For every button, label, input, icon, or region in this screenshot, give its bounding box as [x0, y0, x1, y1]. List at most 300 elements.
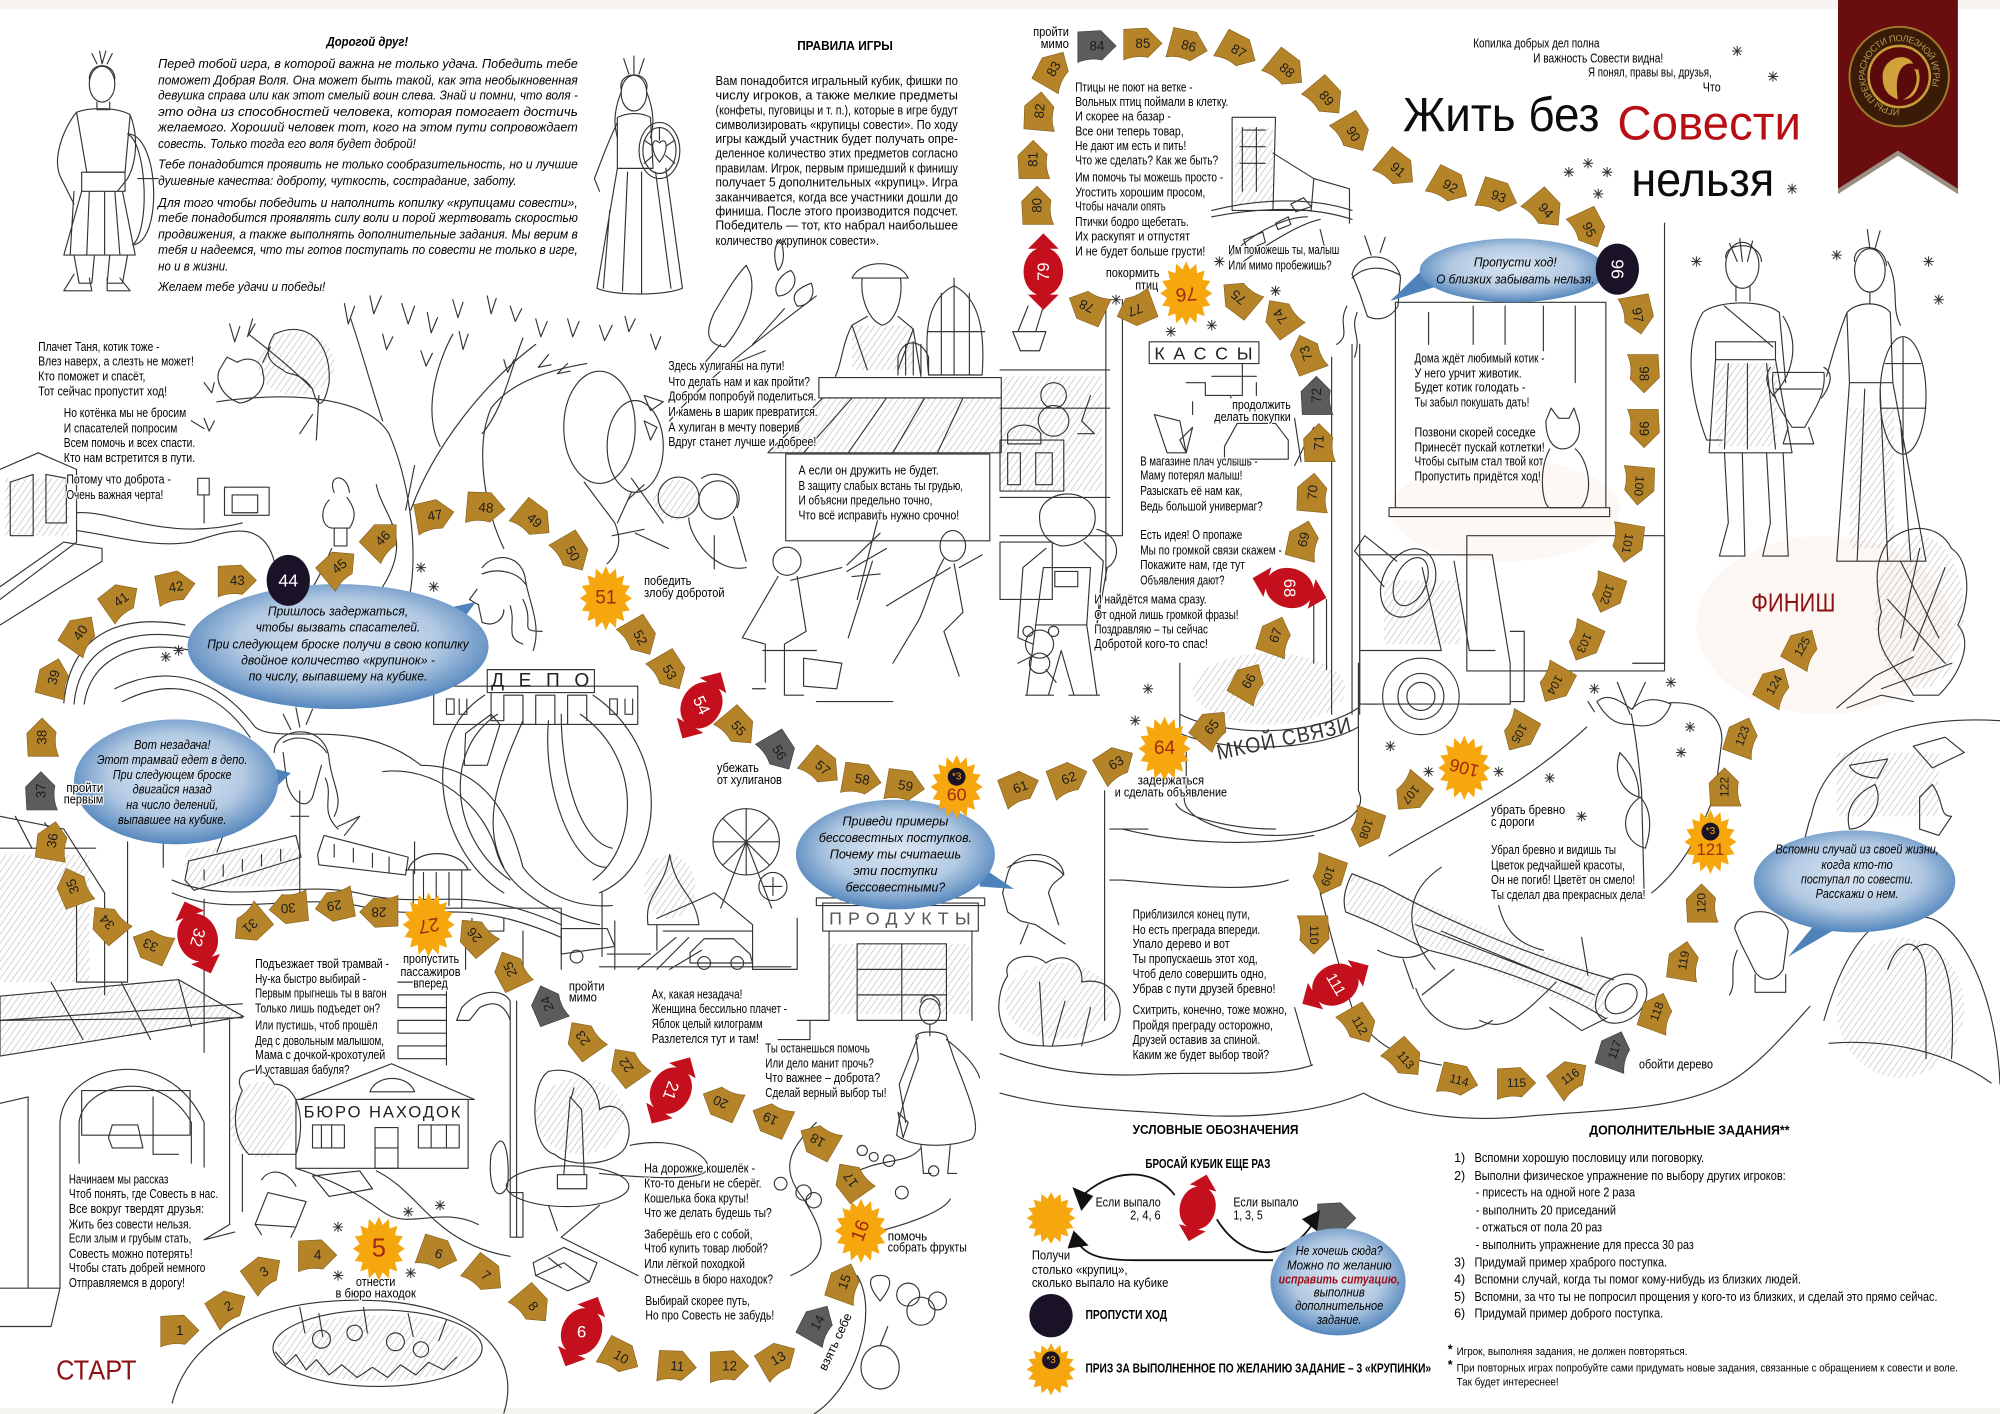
- callout: tram to depot: Вот незадача!: [134, 738, 211, 752]
- tile 49: [509, 496, 559, 545]
- poem: hooligans: Что всё исправить нужно срочно!: [798, 508, 959, 522]
- tile 81: 81: [1026, 152, 1041, 167]
- tile 55: [714, 704, 763, 754]
- illustration: speaking heads: [274, 236, 1788, 995]
- poem: hooligans: Здесь хулиганы на пути!: [668, 359, 784, 373]
- tile 72: [1301, 376, 1333, 415]
- legend panel: 1, 3, 5: [1233, 1209, 1263, 1223]
- tile 45: 45: [329, 556, 350, 577]
- tile 125: [1779, 622, 1826, 672]
- intro letter: Для того чтобы победить и наполнить копилку «крупицами совести»,: [156, 196, 578, 210]
- tile 86: 86: [1180, 37, 1198, 55]
- tile 94: 94: [1535, 200, 1557, 221]
- intro letter: желаемого. Хороший человек тот, кого на этом пути сопровождает: [157, 121, 578, 135]
- star 60: [931, 755, 983, 819]
- small action labels: вперед: [413, 976, 448, 990]
- tile 115: [1497, 1068, 1536, 1099]
- tile 7: 7: [478, 1267, 494, 1284]
- callout: examples: эти поступки: [853, 864, 938, 878]
- candy 68: 68: [1280, 579, 1299, 597]
- star 5: 5: [372, 1235, 386, 1263]
- callout: tram to depot: на число делений,: [126, 798, 218, 812]
- tile 22: [603, 1040, 651, 1089]
- poem: apples: Яблок целый килограмм: [652, 1017, 763, 1031]
- footnotes: Так будет интереснее!: [1457, 1377, 1559, 1389]
- poem: hooligans: А хулиган в мечту поверив: [668, 420, 800, 434]
- tile 70: 70: [1304, 484, 1321, 500]
- tile 86: [1166, 26, 1211, 67]
- tile 82: [1023, 91, 1058, 131]
- poem: tram: Подъезжает твой трамвай -: [255, 957, 389, 971]
- intro letter: Перед тобой игра, в которой важна не только удача. Победить тебе: [158, 57, 578, 71]
- tile 2: 2: [221, 1298, 235, 1314]
- tile 73: [1285, 330, 1328, 377]
- tile 87: [1214, 28, 1263, 75]
- poem: kitten: Очень важная черта!: [66, 488, 163, 502]
- poem: piggy bank: Что: [1703, 80, 1721, 94]
- tile 42: [155, 568, 198, 606]
- tile 66: 66: [1239, 671, 1259, 691]
- tile 98: [1628, 355, 1659, 393]
- extra tasks list: Придумай пример доброго поступка.: [1474, 1307, 1663, 1321]
- star 16: 16: [847, 1217, 874, 1244]
- tile 48: [465, 491, 506, 526]
- tile 45: [315, 542, 365, 591]
- poem: kitten: [38, 340, 195, 502]
- rules of the game: количество «крупинок совести».: [716, 234, 879, 248]
- illustration: hero couple with vase: [1691, 230, 1926, 561]
- small action labels: от хулиганов: [717, 773, 782, 787]
- intro letter: поможет Добрая Воля. Она может быть такой, как эта необыкновенная: [158, 73, 578, 87]
- tile 104: 104: [1544, 673, 1566, 697]
- tile 122: 122: [1717, 777, 1731, 797]
- legend: skip turn: [1029, 1294, 1167, 1337]
- tile 47: 47: [426, 507, 444, 524]
- legend: optional task bubble: исправить ситуацию,: [1279, 1272, 1400, 1286]
- star 64: [1139, 717, 1191, 781]
- intro letter: Желаем тебе удачи и победы!: [157, 280, 326, 294]
- extra tasks list: Вспомни случай, когда ты помог кому-нибудь из близких людей.: [1474, 1272, 1801, 1286]
- tile 13: [754, 1336, 803, 1382]
- tile 37: [26, 772, 57, 810]
- tile 41: 41: [111, 589, 132, 610]
- legend panel: сколько выпало на кубике: [1032, 1276, 1168, 1290]
- intro letter: душевные качества: доброту, чуткость, сострадание, заботу.: [158, 174, 517, 188]
- poem: birds: И скорее на базар -: [1075, 110, 1171, 124]
- poem: end of the road: Друзей оставив за спиной.: [1133, 1033, 1260, 1047]
- tile 87: 87: [1228, 41, 1249, 61]
- tile 14: 14: [807, 1312, 828, 1333]
- poem: hooligans: Вдруг станет лучше и добрее!: [668, 435, 816, 449]
- intro letter: Дорогой друг!: [326, 35, 408, 49]
- intro letter: тебя и надеемся, что ты готов поступать по совести не только в игре,: [158, 243, 578, 257]
- poem: tram: Дед с довольным малышом,: [255, 1034, 384, 1048]
- candy 79: 79: [1034, 262, 1053, 281]
- poem: start: Жить без совести нельзя.: [69, 1217, 191, 1231]
- tile 57: [797, 744, 847, 793]
- tile 78: [1063, 283, 1111, 328]
- tile 117: 117: [1605, 1038, 1625, 1061]
- tile 116: 116: [1558, 1065, 1582, 1088]
- tile 112: 112: [1349, 1014, 1371, 1038]
- candy 79: [1024, 233, 1063, 310]
- tile 50: [549, 529, 596, 578]
- rules of the game: Вам понадобится игральный кубик, фишки по: [716, 74, 958, 88]
- tile 94: [1521, 186, 1570, 236]
- finish label: ФИНИШ: [1751, 589, 1835, 617]
- tile 80: 80: [1029, 198, 1044, 213]
- small action labels: покормить: [1106, 266, 1159, 280]
- small action labels: пропустить: [403, 952, 459, 966]
- callout: rescuers: Пришлось задержаться,: [268, 605, 408, 619]
- poem: hungry cat: У него урчит животик.: [1415, 366, 1522, 380]
- illustration: flower bed: [172, 1300, 508, 1413]
- tile 4: 4: [314, 1248, 322, 1263]
- illustration: man with bird cages and stall: [768, 264, 1001, 541]
- poem: start: Чтоб понять, где Совесть в нас.: [69, 1187, 218, 1201]
- poem: tram: Ну-ка быстро выбирай -: [255, 972, 366, 986]
- tile 124: 124: [1763, 672, 1785, 697]
- illustration: ferris wheel and park: [647, 809, 797, 969]
- poem: kitten: Всем помочь и всех спасти.: [64, 436, 195, 450]
- legend: optional task bubble: задание.: [1316, 1313, 1362, 1327]
- poem: hooligans: А если он дружить не будет.: [798, 464, 939, 478]
- tile 109: 109: [1318, 864, 1338, 888]
- small action labels: и сделать объявление: [1115, 786, 1227, 800]
- tile 77: 77: [1126, 300, 1145, 320]
- tile 53: 53: [659, 662, 680, 682]
- poem: hooligans: В защиту слабых встань ты грудью,: [798, 479, 963, 493]
- small action labels: мимо: [1041, 37, 1069, 51]
- skip 44: 44: [278, 570, 298, 590]
- extra tasks list: Вспомни, за что ты не попросил прощения у кого-то из близких, и сделай это прямо сейчас.: [1474, 1290, 1937, 1304]
- illustration: right trees and garden: [1791, 528, 2000, 1084]
- tile 120: 120: [1695, 893, 1709, 913]
- candy 21: 21: [659, 1079, 683, 1102]
- small action labels: убрать бревно: [1491, 803, 1565, 817]
- callout: examples: Почему ты считаешь: [830, 848, 961, 862]
- tile 123: [1721, 713, 1764, 760]
- small action labels: птиц: [1135, 279, 1158, 293]
- tile 107: [1386, 769, 1435, 819]
- intro letter: но и в жизни.: [158, 260, 228, 274]
- intro letter: тебе понадобится проявлять силу воли и порой жертвовать скоростью: [158, 211, 578, 225]
- tile 81: [1018, 140, 1050, 179]
- tile 1: [161, 1315, 199, 1347]
- footnotes: [1448, 1342, 1958, 1389]
- illustration: domed building and street: [406, 854, 791, 969]
- poem: hungry cat: [1415, 351, 1545, 484]
- tile 2: [204, 1283, 253, 1330]
- candy 111: 111: [1322, 970, 1349, 999]
- callout: remember: Расскажи о нем.: [1816, 887, 1899, 901]
- poem: apples: Разлетелся тут и там!: [652, 1032, 759, 1046]
- rules of the game: получает 5 дополнительных «крупиц». Игра: [716, 175, 958, 189]
- tile 15: [823, 1259, 867, 1306]
- legend: optional task bubble: Можно по желанию: [1287, 1258, 1392, 1272]
- tile 6: 6: [433, 1245, 445, 1262]
- poem: flower: Убрал бревно и видишь ты: [1491, 843, 1616, 857]
- poem: end of the road: [1133, 908, 1287, 1062]
- rules of the game: символизировать «крупицы совести». По ходу: [716, 118, 959, 132]
- poem: wallet: Отнесёшь в бюро находок?: [644, 1272, 773, 1286]
- legend: prize: [1027, 1343, 1431, 1395]
- tile 33: 33: [141, 935, 160, 955]
- candy 54: [665, 662, 738, 748]
- small action labels: злобу добротой: [644, 586, 725, 600]
- tile 75: 75: [1228, 287, 1249, 308]
- tile 119: [1665, 939, 1703, 982]
- poem: tram: Или пустишь, чтоб прошёл: [255, 1018, 378, 1032]
- illustration: road lines and lily: [1389, 682, 1722, 1024]
- intro letter: Тебе понадобится проявить не только сообразительность, но и лучшие: [158, 158, 578, 172]
- poem: hungry cat: Чтобы сытым стал твой кот: [1415, 455, 1544, 469]
- tile 36: [34, 819, 72, 862]
- poem: hooligans: Что делать нам и как пройти?: [668, 375, 810, 389]
- poem: apples: Женщина бессильно плачет -: [652, 1002, 787, 1016]
- poem: end of the road: Убрав с пути друзей бревно!: [1133, 982, 1276, 996]
- tile 42: 42: [167, 578, 185, 595]
- tile 80: [1022, 186, 1054, 224]
- star 5: [353, 1217, 405, 1281]
- tile 85: [1124, 28, 1162, 60]
- tile 12: [710, 1351, 749, 1383]
- tile 113: 113: [1394, 1048, 1417, 1072]
- extra tasks list: - выполнить упражнение для пресса 30 раз: [1476, 1238, 1694, 1252]
- tile 46: [358, 514, 408, 564]
- tile 48: 48: [478, 500, 494, 516]
- intro letter: это одна из способностей человека, которая помогает достичь: [158, 105, 578, 119]
- candy 68: [1247, 559, 1332, 617]
- tile 98: 98: [1637, 366, 1652, 381]
- tile 89: [1302, 74, 1351, 124]
- poem: birds: Не дают им есть и пить!: [1075, 139, 1186, 153]
- poem: start: Чтобы стать добрей немного: [69, 1261, 205, 1275]
- legend: optional task bubble: выполнив: [1314, 1286, 1365, 1300]
- rules of the game: правилам. Игрок, первым пришедший к финишу: [716, 161, 959, 175]
- tile 13: 13: [768, 1348, 788, 1369]
- legend panel: Если выпало: [1096, 1195, 1161, 1209]
- tile 92: 92: [1440, 176, 1460, 196]
- legend: arrows: [1069, 1175, 1319, 1260]
- tile 40: [57, 608, 105, 658]
- poem: flower: Ты сделал два прекрасных дела!: [1491, 888, 1645, 902]
- star 60: *3: [952, 771, 962, 782]
- poem: start: [69, 1172, 218, 1290]
- tile 66: [1226, 657, 1273, 706]
- poem: start: Все вокруг твердят друзья:: [69, 1202, 204, 1216]
- tile 118: [1636, 988, 1679, 1035]
- poem: piggy bank: [1473, 36, 1721, 94]
- tile 20: 20: [711, 1092, 731, 1112]
- small action labels: пройти: [1033, 25, 1069, 39]
- tile 105: 105: [1508, 721, 1530, 746]
- illustration: park tree and curved edges: [999, 893, 1991, 1118]
- callout: tram to depot: двигайся назад: [133, 783, 212, 797]
- extra tasks list: [1454, 1151, 1937, 1321]
- tile 25: [488, 945, 533, 993]
- star 16: [835, 1199, 887, 1263]
- poem: piggy bank: И важность Совести видна!: [1533, 51, 1663, 65]
- logo emblem: [1848, 26, 1950, 128]
- tile 116: [1546, 1053, 1595, 1101]
- small action labels: победить: [644, 574, 691, 588]
- poem: lost child: И найдётся мама сразу.: [1094, 592, 1207, 606]
- poem: wallet: Кто-то деньги не сберёг.: [644, 1177, 761, 1191]
- illustration: bird on branch: [644, 240, 816, 440]
- tile 78: 78: [1077, 296, 1097, 316]
- tile 8: 8: [525, 1298, 541, 1314]
- poem: hooligans: И объясни предельно точно,: [798, 494, 932, 508]
- legend: prize: *3: [1046, 1355, 1056, 1366]
- tile 67: [1255, 612, 1298, 659]
- illustration: left houses and road: [0, 453, 332, 625]
- poem: kitten: Тот сейчас пропустит ход!: [38, 385, 167, 399]
- star 60: 60: [947, 785, 967, 805]
- start label: СТАРТ: [56, 1354, 136, 1385]
- tile 77: [1112, 288, 1158, 331]
- tile 90: [1329, 110, 1376, 159]
- tile 110: 110: [1307, 925, 1321, 945]
- tile 17: [827, 1155, 875, 1204]
- tile 91: 91: [1387, 159, 1408, 180]
- star 121: [1684, 810, 1736, 874]
- small action labels: в бюро находок: [335, 1286, 416, 1300]
- skip 44: [267, 555, 310, 606]
- tile 3: [240, 1248, 289, 1296]
- poem: end of the road: Схитрить, конечно, тоже можно,: [1133, 1003, 1287, 1017]
- tile 56: 56: [769, 742, 790, 763]
- poem: tram: И уставшая бабуля?: [255, 1063, 350, 1077]
- poem: lost child: Разыскать её нам как,: [1140, 484, 1242, 498]
- tile 90: 90: [1343, 124, 1364, 144]
- small action labels: пройти: [569, 980, 605, 994]
- callout: tram to depot: Этот трамвай едет в депо.: [97, 753, 247, 767]
- tile 46: 46: [372, 528, 393, 549]
- tile 24: 24: [537, 994, 557, 1013]
- star 27: 27: [416, 913, 441, 937]
- extra tasks list: - отжаться от пола 20 раз: [1476, 1221, 1602, 1235]
- poem: hungry cat: Принесёт пускай котлетки!: [1415, 440, 1545, 454]
- poem: flower: [1491, 843, 1645, 902]
- tile 8: [508, 1282, 557, 1331]
- tile 101: [1608, 522, 1646, 565]
- tile 43: [218, 565, 256, 597]
- extra tasks list: 5): [1454, 1290, 1465, 1304]
- poem: end of the road: Пройдя преграду осторожно,: [1133, 1018, 1273, 1032]
- legend: skip turn: ПРОПУСТИ ХОД: [1085, 1308, 1167, 1322]
- poem: hungry cat: Дома ждёт любимый котик -: [1415, 351, 1545, 365]
- tile 19: 19: [760, 1109, 780, 1129]
- callout: tram to depot: При следующем броске: [113, 768, 232, 782]
- star 27: [403, 893, 455, 957]
- tile 11: [657, 1349, 698, 1384]
- poem: wallet: Заберёшь его с собой,: [644, 1228, 753, 1242]
- tile 18: [793, 1116, 842, 1163]
- tile 31: 31: [239, 915, 261, 937]
- tile 53: [646, 648, 692, 697]
- tile 39: [34, 655, 75, 700]
- extra tasks list: 6): [1454, 1307, 1465, 1321]
- poem: start: Начинаем мы рассказ: [69, 1172, 169, 1186]
- tile 24: [526, 980, 569, 1027]
- title: [1403, 88, 1801, 207]
- candy 21: [635, 1048, 707, 1134]
- illustration: depot and tracks: [64, 622, 651, 937]
- legend panel: Если выпало: [1233, 1195, 1299, 1209]
- poem: kitten: И спасателей попросим: [64, 422, 177, 436]
- small action labels: пассажиров: [401, 965, 461, 979]
- poem: birds: И не будет больше грусти!: [1075, 244, 1205, 258]
- small action labels: обойти дерево: [1639, 1057, 1713, 1071]
- illustration: fallen log: [1344, 874, 1657, 1033]
- rules of the game: деленное количество этих предметов согласно: [716, 147, 958, 161]
- poem: start: Если злым и грубым стать,: [69, 1231, 191, 1245]
- poem: lost child: Добротой кого-то спас!: [1094, 637, 1208, 651]
- poem: tram: Первым прыгнешь ты в вагон: [255, 987, 387, 1001]
- tile 110: [1297, 916, 1329, 954]
- intro letter: девушка справа или как этот смелый воин слева. Знай и помни, что воля -: [158, 89, 578, 103]
- legend panel: 2, 4, 6: [1130, 1209, 1161, 1223]
- tile 63: [1092, 740, 1141, 787]
- legend panel: столько «крупиц»,: [1032, 1263, 1128, 1277]
- building signs: ПРОДУКТЫ: [829, 908, 972, 928]
- tile 75: [1214, 272, 1264, 321]
- intro letter: совесть. Только тогда его воля будет доброй!: [158, 137, 416, 151]
- tile 29: [312, 886, 356, 924]
- tile 39: 39: [44, 668, 63, 686]
- heading: extra tasks: ДОПОЛНИТЕЛЬНЫЕ ЗАДАНИЯ**: [1589, 1124, 1790, 1138]
- small action labels: с дороги: [1491, 815, 1534, 829]
- callout: rescuers: двойное количество «крупинок» -: [241, 654, 435, 668]
- tile 29: 29: [326, 897, 343, 914]
- tile 31: [225, 901, 275, 950]
- small action labels: задержаться: [1138, 774, 1204, 788]
- star 51: 51: [595, 588, 617, 609]
- poem: tram: [255, 957, 389, 1077]
- footnotes: *: [1448, 1342, 1453, 1356]
- tile 114: 114: [1448, 1071, 1471, 1090]
- poem: end of the road: Приблизился конец пути,: [1133, 908, 1250, 922]
- tile 92: [1425, 163, 1474, 210]
- tile 84: 84: [1089, 38, 1105, 53]
- tile 26: 26: [464, 924, 485, 945]
- illustration: loudspeaker column: [1105, 357, 1361, 1020]
- tile 59: [884, 767, 927, 805]
- callout: tram to depot: выпавшее на кубике.: [118, 813, 226, 827]
- tile 34: [83, 897, 132, 947]
- title: Совести: [1617, 97, 1801, 151]
- legend panel: БРОСАЙ КУБИК ЕЩЕ РАЗ: [1145, 1156, 1271, 1171]
- tile 22: 22: [616, 1055, 637, 1075]
- illustration: maiden with shield: [594, 56, 682, 294]
- poem: birds: Их раскупят и отпустят: [1075, 230, 1190, 244]
- tile 115: 115: [1507, 1076, 1526, 1090]
- tile 36: 36: [44, 832, 61, 849]
- star 106: 106: [1447, 754, 1481, 781]
- candy 9: 9: [577, 1322, 586, 1341]
- poem: birds: Птицы не поют на ветке -: [1075, 80, 1193, 94]
- tile 69: [1284, 517, 1325, 562]
- tile 49: 49: [524, 510, 545, 531]
- tile 65: 65: [1201, 717, 1222, 738]
- tile 103: 103: [1573, 631, 1595, 655]
- poem: lost child: Покажите нам, где тут: [1140, 558, 1245, 572]
- legend: prize: ПРИЗ ЗА ВЫПОЛНЕННОЕ ПО ЖЕЛАНИЮ ЗАДАНИЕ – 3 «КРУПИНКИ»: [1085, 1362, 1431, 1376]
- tile 58: [841, 761, 884, 799]
- tile 56: [755, 728, 802, 777]
- small action labels: убежать: [717, 761, 759, 775]
